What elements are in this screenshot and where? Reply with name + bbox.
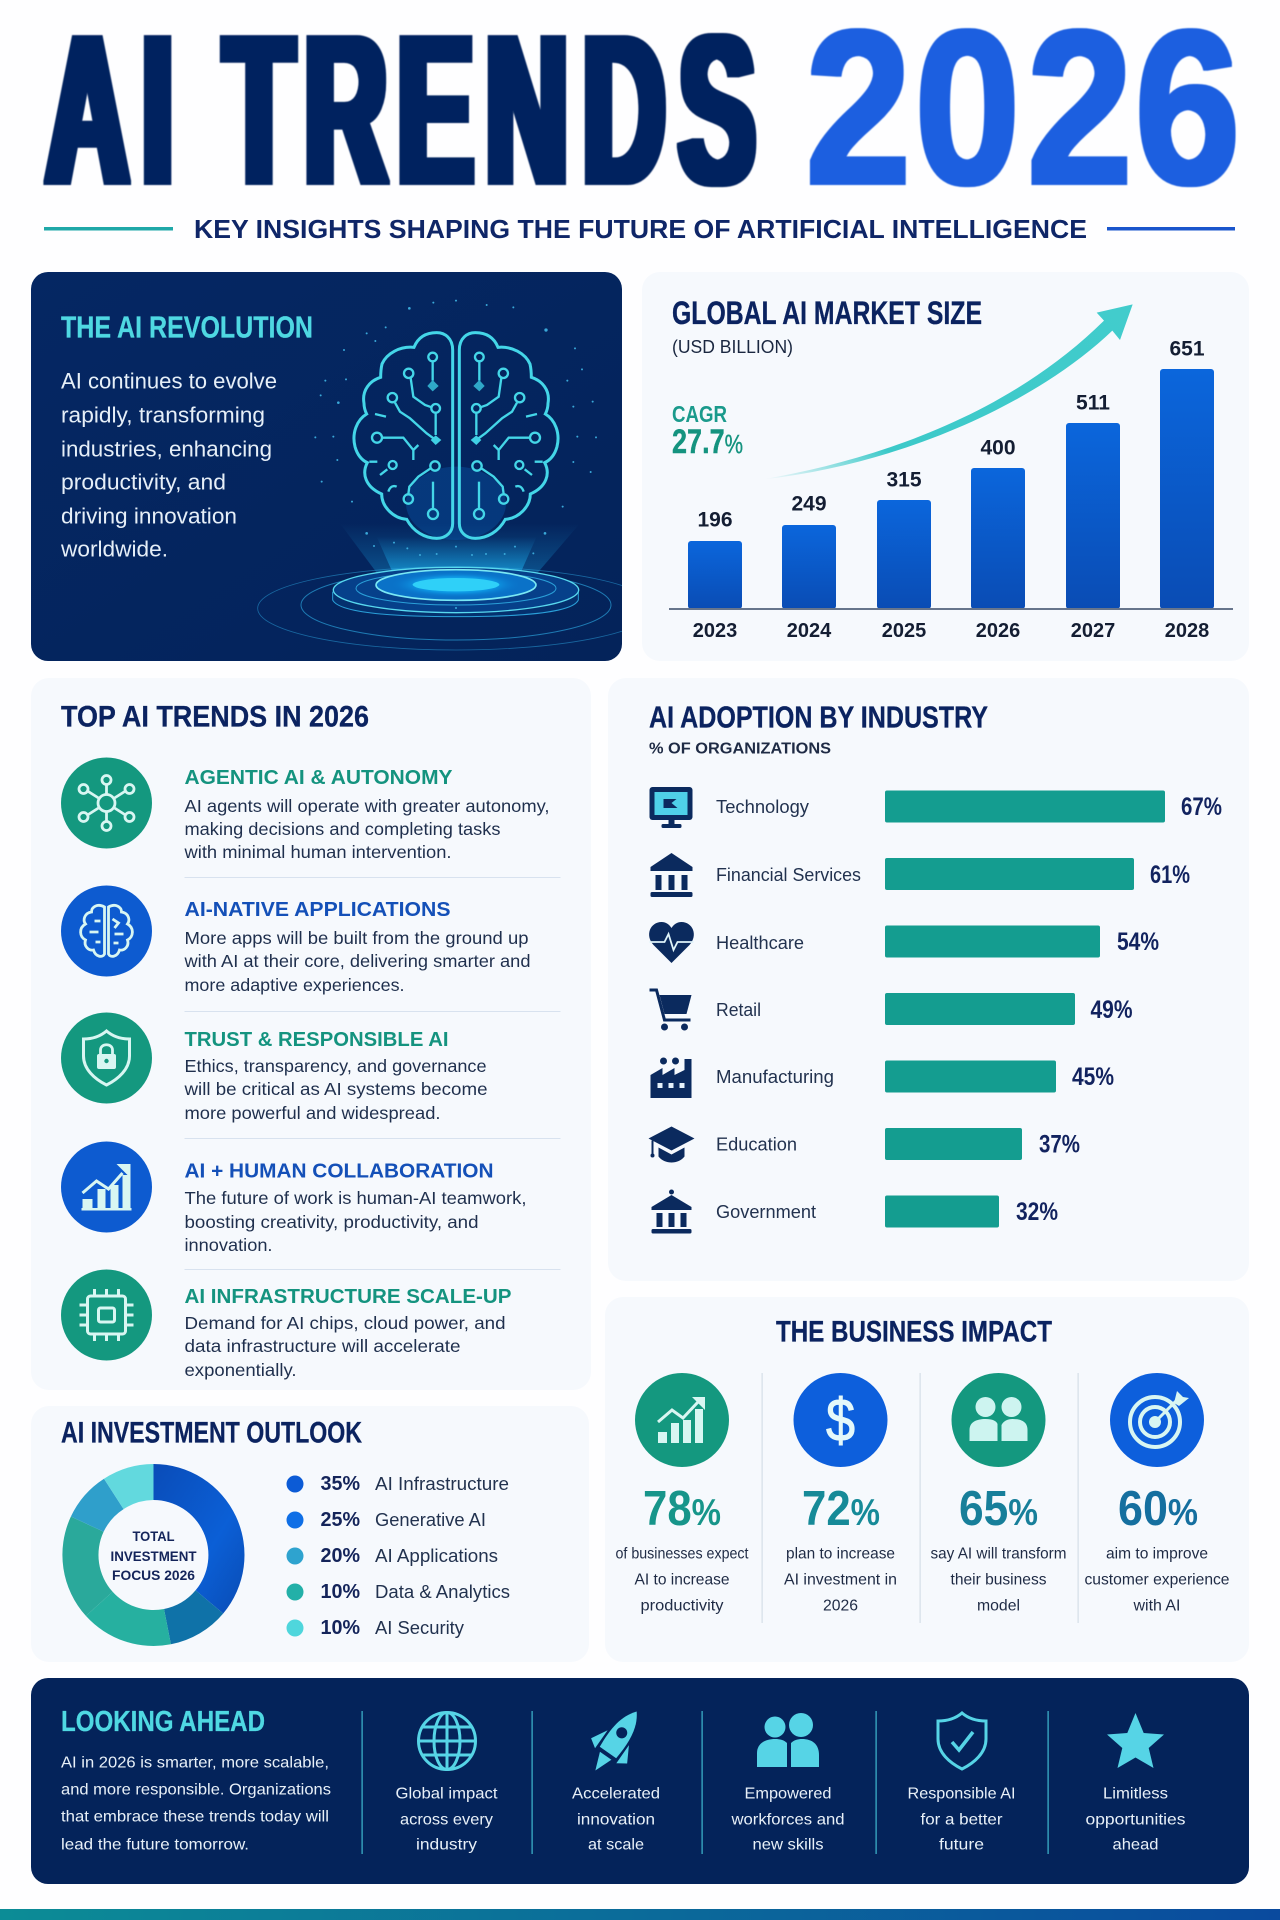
trend: AI infrastructure scale-up (61, 1270, 512, 1380)
stat: investment: plan to increase (786, 1546, 895, 1562)
stat: productivity: productivity (640, 1598, 724, 1614)
CAGR callout (672, 401, 743, 461)
bar chart: 2025 (882, 620, 926, 642)
stat: investment (784, 1373, 897, 1614)
trend: AI plus human collaboration: innovation. (184, 1235, 272, 1255)
item: limitless opportunities: Limitless (1103, 1786, 1168, 1802)
donut centre label: INVESTMENT (110, 1548, 197, 1564)
heading: top trends: TOP AI TRENDS IN 2026 (61, 700, 369, 734)
item: accelerated innovation: innovation (577, 1812, 655, 1828)
stat: investment: 72% (802, 1482, 880, 1536)
donut chart (62, 1464, 244, 1646)
legend: Data & Analytics (375, 1582, 510, 1602)
legend: AI Security (375, 1618, 464, 1638)
item: global impact (396, 1712, 498, 1854)
bar chart (669, 338, 1233, 642)
stat: customer experience: aim to improve (1106, 1546, 1208, 1562)
unit label: percent of organizations: % OF ORGANIZATIONS (649, 740, 831, 758)
bar chart: 2024 (787, 620, 832, 642)
row: financial services: Financial Services (716, 865, 861, 885)
trend: AI-native applications: more adaptive experiences. (184, 975, 404, 995)
trend: AI plus human collaboration: boosting creativity, productivity, and (184, 1212, 478, 1232)
item: limitless opportunities: ahead (1112, 1836, 1158, 1854)
looking ahead text: lead the future tomorrow. (61, 1836, 249, 1854)
item: empowered workforces: workforces and (730, 1812, 844, 1828)
row: retail (650, 990, 1132, 1030)
trend: trust and responsible AI (61, 1012, 488, 1123)
trend: agentic AI: making decisions and completing tasks (184, 819, 501, 839)
heading: looking ahead: LOOKING AHEAD (61, 1706, 265, 1738)
trend: agentic AI: with minimal human intervention. (183, 842, 452, 862)
item: empowered workforces: new skills (752, 1836, 824, 1854)
bar chart: 2023 (693, 620, 737, 642)
footer gradient bar (0, 1909, 1280, 1920)
trend: AI-native applications: More apps will be built from the ground up (184, 928, 528, 948)
title (46, 0, 1240, 230)
stat: transform business model: their business (950, 1572, 1046, 1588)
stat: customer experience: customer experience (1084, 1572, 1230, 1588)
bar chart: 400 (980, 436, 1016, 460)
row: education: Education (716, 1134, 797, 1154)
CAGR callout: 27.7% (672, 423, 743, 461)
trend: AI-native applications: with AI at their core, delivering smarter and (183, 951, 530, 971)
trend: AI infrastructure scale-up: exponentially. (184, 1360, 296, 1380)
row: technology: 67% (1181, 793, 1222, 821)
row: healthcare: Healthcare (716, 933, 804, 953)
stat: productivity: of businesses expect (616, 1546, 749, 1562)
bar chart: 249 (791, 492, 827, 516)
heading: business impact: THE BUSINESS IMPACT (776, 1316, 1052, 1348)
row: government (652, 1190, 1058, 1234)
item: responsible AI (908, 1713, 1016, 1854)
trend: trust and responsible AI: TRUST & RESPONSIBLE AI (184, 1029, 448, 1051)
bar chart: 651 (1169, 338, 1205, 360)
trend: AI plus human collaboration (61, 1142, 526, 1255)
intro text: industries, enhancing (61, 436, 272, 462)
legend: 10% (320, 1581, 360, 1603)
bar chart: 196 (697, 508, 733, 532)
icon: circuit brain on hologram platform (258, 300, 654, 650)
panel: the AI revolution (31, 272, 654, 661)
bar chart: 315 (886, 468, 922, 492)
stat: customer experience: with AI (1133, 1598, 1180, 1614)
trend: AI plus human collaboration: AI + HUMAN COLLABORATION (184, 1160, 494, 1182)
row: retail: Retail (716, 1000, 761, 1020)
stat: productivity: AI to increase (634, 1572, 730, 1588)
legend: Generative AI (375, 1510, 486, 1530)
intro text: AI continues to evolve (61, 368, 277, 394)
item: limitless opportunities (1086, 1713, 1186, 1854)
stat: customer experience (1084, 1373, 1230, 1614)
donut centre label: FOCUS 2026 (112, 1567, 195, 1583)
item: limitless opportunities: opportunities (1086, 1812, 1186, 1828)
legend: AI Infrastructure (375, 1474, 509, 1494)
trend: agentic AI: AI agents will operate with greater autonomy, (184, 796, 550, 816)
item: responsible AI: for a better (920, 1812, 1003, 1828)
donut centre label (110, 1528, 197, 1583)
row: manufacturing: 45% (1072, 1063, 1114, 1091)
intro text (60, 368, 277, 562)
row: healthcare: 54% (1117, 928, 1159, 956)
legend: 10% (320, 1617, 360, 1639)
bar chart: 2026 (976, 620, 1020, 642)
heading: adoption: AI ADOPTION BY INDUSTRY (649, 700, 988, 734)
stat: transform business model (930, 1373, 1066, 1614)
trend: AI-native applications (61, 886, 530, 995)
row: manufacturing: Manufacturing (716, 1067, 834, 1087)
row: financial services: 61% (1150, 861, 1190, 889)
panel: AI adoption by industry (608, 678, 1249, 1281)
legend: 25% (320, 1509, 360, 1531)
stat: investment: $ (826, 1386, 855, 1454)
trend: trust and responsible AI: more powerful and widespread. (184, 1103, 440, 1123)
item: empowered workforces (730, 1713, 844, 1854)
row: technology (650, 787, 1222, 828)
stat: transform business model: 65% (959, 1482, 1038, 1536)
unit label: (USD BILLION) (672, 337, 793, 357)
row: government: Government (716, 1202, 816, 1222)
row: education (648, 1126, 1080, 1162)
panel: global AI market size (642, 272, 1249, 661)
item: responsible AI: Responsible AI (908, 1786, 1016, 1802)
intro text: rapidly, transforming (61, 402, 265, 428)
panel: the business impact (605, 1297, 1249, 1662)
stat: productivity (616, 1373, 749, 1614)
row: government: 32% (1016, 1198, 1058, 1226)
trend: AI infrastructure scale-up: data infrastructure will accelerate (184, 1336, 460, 1356)
stat: transform business model: say AI will transform (930, 1546, 1066, 1562)
item: accelerated innovation: Accelerated (572, 1786, 660, 1802)
CAGR callout: CAGR (672, 401, 727, 427)
donut centre label: TOTAL (132, 1528, 175, 1544)
stat: investment: AI investment in (784, 1572, 897, 1588)
intro text: driving innovation (61, 504, 237, 528)
looking ahead text: and more responsible. Organizations (61, 1782, 331, 1798)
item: responsible AI: future (939, 1836, 984, 1854)
looking ahead text (61, 1754, 331, 1854)
item: global impact: Global impact (396, 1786, 498, 1802)
stat: customer experience: 60% (1118, 1482, 1198, 1536)
row: technology: Technology (716, 797, 809, 817)
panel: AI investment outlook (31, 1406, 589, 1662)
bar chart: 511 (1076, 392, 1110, 414)
legend: 20% (320, 1545, 360, 1567)
item: accelerated innovation: at scale (588, 1836, 644, 1854)
trend: agentic AI (61, 758, 550, 862)
item: accelerated innovation (572, 1699, 660, 1854)
row: manufacturing (650, 1058, 1114, 1098)
item: global impact: across every (400, 1812, 493, 1828)
legend: 35% (320, 1473, 360, 1495)
row: education: 37% (1039, 1130, 1080, 1158)
item: global impact: industry (416, 1836, 477, 1854)
stat: transform business model: model (977, 1598, 1020, 1614)
trend: AI infrastructure scale-up: AI INFRASTRUCTURE SCALE-UP (184, 1286, 512, 1308)
trend: trust and responsible AI: will be critical as AI systems become (183, 1079, 488, 1099)
legend: AI Applications (375, 1546, 498, 1566)
looking ahead text: AI in 2026 is smarter, more scalable, (61, 1754, 329, 1772)
bar chart: 2027 (1071, 620, 1115, 642)
row: financial services (650, 853, 1190, 897)
item: empowered workforces: Empowered (744, 1786, 832, 1802)
trend: agentic AI: AGENTIC AI & AUTONOMY (184, 767, 453, 789)
trend: AI-native applications: AI-NATIVE APPLICATIONS (184, 899, 450, 921)
bar chart: 2028 (1165, 620, 1209, 642)
trend: AI plus human collaboration: The future of work is human-AI teamwork, (184, 1188, 526, 1208)
row: healthcare (649, 922, 1159, 963)
heading: market size: GLOBAL AI MARKET SIZE (672, 295, 982, 331)
growth arrow (763, 304, 1133, 479)
panel: looking ahead (31, 1678, 1249, 1884)
intro text: productivity, and (61, 470, 226, 494)
panel: top AI trends (31, 678, 591, 1390)
intro text: worldwide. (60, 536, 168, 562)
heading: the AI revolution: THE AI REVOLUTION (61, 310, 313, 344)
stat: investment: 2026 (823, 1598, 858, 1614)
trend: trust and responsible AI: Ethics, transparency, and governance (184, 1056, 486, 1076)
trend: AI infrastructure scale-up: Demand for AI chips, cloud power, and (184, 1313, 506, 1333)
looking ahead text: that embrace these trends today will (61, 1808, 329, 1826)
heading: investment: AI INVESTMENT OUTLOOK (61, 1416, 362, 1450)
stat: productivity: 78% (643, 1482, 721, 1536)
row: retail: 49% (1090, 996, 1132, 1024)
legend (286, 1473, 510, 1639)
subtitle with rules: KEY INSIGHTS SHAPING THE FUTURE OF ARTIFICIAL INTELLIGENCE (194, 214, 1087, 244)
